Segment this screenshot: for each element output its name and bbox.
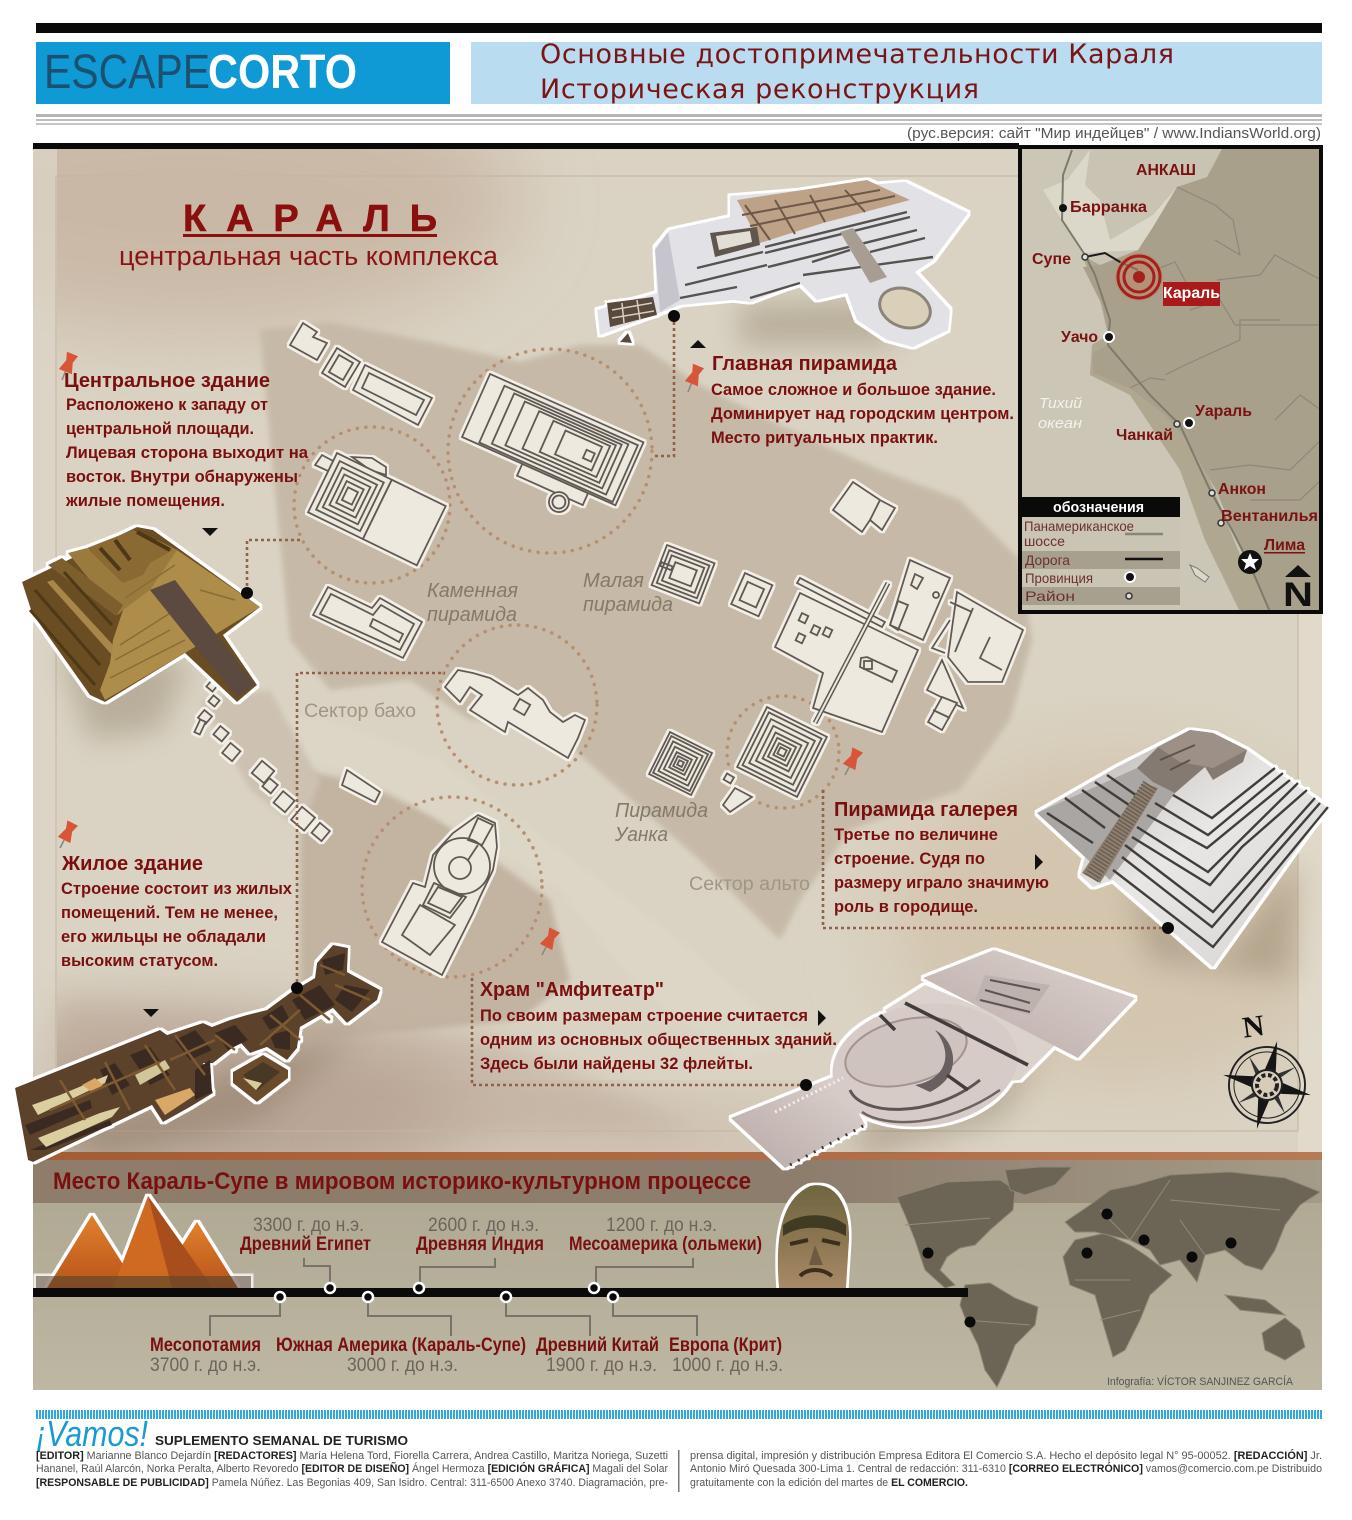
- footer masthead: SUPLEMENTO SEMANAL DE TURISMO: [155, 1433, 408, 1448]
- plan: Uanka pyramid: [649, 732, 712, 795]
- page title banner: Историческая реконструкция: [540, 74, 979, 105]
- plan: central building: [308, 453, 446, 565]
- map: place names: Анкон: [1218, 481, 1266, 498]
- text block: central building: [64, 370, 309, 510]
- map: legend: Провинция: [1025, 570, 1093, 586]
- timeline band: [33, 1152, 1322, 1390]
- timeline labels: Европа (Крит): [669, 1335, 782, 1356]
- plan: square platform: [731, 573, 772, 616]
- timeline labels: 1900 г. до н.э.: [546, 1355, 657, 1376]
- map: place names: Барранка: [1070, 199, 1147, 216]
- site name labels: Сектор бахо: [304, 701, 416, 722]
- logo: EscapeCorto: [36, 42, 450, 104]
- world map: [897, 1167, 1320, 1387]
- text block: residential building: его жильцы не обладали: [61, 927, 266, 946]
- page title banner: [471, 39, 1322, 105]
- text block: gallery pyramid: [834, 799, 1049, 916]
- heading: Karal: КАРАЛЬ: [183, 198, 437, 240]
- map: place names: Уачо: [1061, 329, 1098, 346]
- text block: main pyramid: [711, 353, 1014, 447]
- text block: main pyramid: Доминирует над городским центром.: [711, 404, 1014, 423]
- footer credits left: [RESPONSABLE DE PUBLICIDAD] Pamela Núñez. Las Begonias 409, San Isidro. Central: 311-6500 Anexo 3740. Diagramación, pre-: [36, 1477, 668, 1489]
- text block: central building: жилые помещения.: [65, 491, 225, 510]
- map: legend: Панамериканское: [1024, 518, 1134, 534]
- map: place names: Лима: [1264, 537, 1305, 554]
- dotted site circles: [294, 349, 839, 977]
- footer credits left: [36, 1450, 668, 1489]
- dotted leaders: [247, 316, 1168, 1085]
- text block: main pyramid: Место ритуальных практик.: [711, 428, 938, 447]
- footer masthead: [36, 1413, 408, 1454]
- timeline labels: 3000 г. до н.э.: [347, 1355, 458, 1376]
- 3D model: residential building: [15, 945, 380, 1162]
- timeline labels: Древний Китай: [536, 1335, 659, 1356]
- footer stripe: [36, 1410, 1322, 1419]
- timeline labels: [150, 1215, 783, 1376]
- plan: chain of small buildings: [194, 680, 380, 841]
- map: road to Caral: [1085, 253, 1138, 270]
- map: place names: Тихий: [1039, 395, 1083, 412]
- plan: north-east block: [833, 482, 895, 532]
- timeline labels: 1000 г. до н.э.: [672, 1355, 783, 1376]
- plan: main pyramid: [450, 374, 644, 533]
- text block: amphitheatre temple: одним из основных общественных зданий.: [480, 1030, 837, 1049]
- 3D model: main pyramid: [597, 180, 968, 347]
- timeline labels: 2600 г. до н.э.: [428, 1215, 539, 1236]
- map: Karal label: Караль: [1163, 285, 1220, 302]
- logo: EscapeCorto: ESCAPE: [44, 46, 210, 99]
- map: coastal band: [1082, 255, 1290, 612]
- direction triangles: [143, 340, 1043, 1026]
- site name labels: Уанка: [614, 824, 668, 846]
- illustration: Olmec head: [778, 1185, 849, 1288]
- text block: central building: восток. Внутри обнаружены: [66, 467, 298, 486]
- text block: main pyramid: Главная пирамида: [712, 353, 898, 375]
- map: Pan-American highway: [1062, 150, 1270, 612]
- text block: residential building: помещений. Тем не менее,: [61, 903, 278, 922]
- footer credits right: gratuitamente con la edición del martes de EL COMERCIO.: [690, 1477, 968, 1489]
- text block: main pyramid: Самое сложное и большое здание.: [711, 380, 996, 399]
- map: place dots: [1059, 204, 1262, 574]
- map: north arrow: N: [1283, 576, 1313, 614]
- timeline labels: 1200 г. до н.э.: [606, 1215, 717, 1236]
- timeline nodes: [275, 1283, 618, 1302]
- timeline bar: [33, 1288, 968, 1297]
- map: place names: [1032, 162, 1318, 554]
- timeline labels: Древняя Индия: [416, 1234, 544, 1255]
- text block: residential building: Жилое здание: [61, 853, 203, 875]
- timeline labels: Месопотамия: [150, 1335, 261, 1356]
- page title banner: Основные достопримечательности Караля: [540, 39, 1174, 70]
- map: place names: АНКАШ: [1136, 162, 1196, 179]
- site name labels: Пирамида: [615, 800, 708, 822]
- timeline labels: Древний Египет: [240, 1234, 371, 1255]
- footer credits left: Hananel, Raúl Alarcón, Norka Peralta, Alberto Revoredo [EDITOR DE DISEÑO] Ángel Hermoza [EDICIÓN GRÁFICA] Magali del Solar: [36, 1462, 668, 1475]
- logo: EscapeCorto: CORTO: [208, 46, 357, 99]
- 3D model: central building: [22, 527, 260, 702]
- site name labels: Каменная: [427, 580, 518, 602]
- timeline labels: 3700 г. до н.э.: [150, 1355, 261, 1376]
- footer masthead: ¡Vamos!: [36, 1413, 148, 1454]
- leader end dots: [241, 310, 1174, 1091]
- inset location map: [1019, 147, 1321, 614]
- 3D model: amphitheatre: [731, 950, 1135, 1168]
- site name labels: Малая: [583, 570, 644, 592]
- timeline heading: Место Караль-Супе в мировом историко-культурном процессе: [53, 1168, 751, 1195]
- timeline labels: 3300 г. до н.э.: [253, 1215, 364, 1236]
- credit line: (рус.версия: сайт "Мир индейцев" / www.IndiansWorld.org): [907, 125, 1321, 142]
- heading: Karal: [119, 198, 499, 271]
- plan: eastern compound: [775, 560, 1023, 732]
- gallery pyramid step lines: [1047, 768, 1328, 947]
- illustration: Egyptian pyramids: [36, 1196, 251, 1288]
- soft shadows under 3D models: [60, 300, 1300, 1160]
- map: legend: Дорога: [1025, 552, 1070, 568]
- map: land: [1083, 147, 1321, 612]
- text block: central building: Лицевая сторона выходит на: [66, 443, 309, 462]
- map: legend: [1019, 497, 1180, 605]
- site name labels: [304, 570, 810, 895]
- footer credits right: Antonio Miró Quesada 300-Lima 1. Central de redacción: 311-6310 [CORREO ELECTRÓNICO] vamos@comercio.com.pe Distribuido: [690, 1462, 1322, 1475]
- text block: residential building: Строение состоит из жилых: [61, 879, 293, 898]
- plan: north trio of buildings: [290, 323, 432, 425]
- site name labels: пирамида: [427, 604, 517, 626]
- text block: gallery pyramid: строение. Судя по: [834, 849, 985, 868]
- icon: compass rose: N: [1240, 1009, 1267, 1045]
- footer credits right: prensa digital, impresión y distribución Empresa Editora El Comercio S.A. Hecho el depósito legal N° 95-00052. [REDACCIÓN] Jr.: [690, 1449, 1322, 1462]
- map: place names: океан: [1038, 415, 1082, 432]
- top map rule: [33, 143, 1019, 149]
- map: pale Barranca province: [1043, 150, 1223, 253]
- text block: residential building: высоким статусом.: [61, 951, 218, 970]
- text block: gallery pyramid: роль в городище.: [834, 897, 978, 916]
- 3D model: gallery pyramid: [1037, 730, 1328, 967]
- text block: gallery pyramid: размеру играло значимую: [834, 873, 1049, 892]
- plan: small pyramid: [652, 545, 715, 603]
- plan: amphitheatre temple: [382, 815, 497, 975]
- map: place names: Уараль: [1195, 403, 1252, 420]
- text block: residential building: [61, 853, 293, 970]
- icon: compass rose: [1213, 1009, 1321, 1139]
- infographic credit: Infografía: VÍCTOR SANJINEZ GARCÍA: [1107, 1375, 1294, 1388]
- footer credits left: [EDITOR] Marianne Blanco Dejardín [REDACTORES] María Helena Tord, Fiorella Carrera, Andrea Castillo, Maritza Noriega, Suzetti: [36, 1450, 668, 1462]
- plan: stone pyramid: [313, 587, 422, 658]
- map: legend: Район: [1025, 588, 1075, 604]
- text block: amphitheatre temple: Здесь были найдены 32 флейты.: [480, 1054, 753, 1073]
- map: place names: Чанкай: [1116, 427, 1173, 444]
- plan: bajo sector complex: [445, 670, 585, 758]
- top black rule: [36, 23, 1322, 33]
- text block: gallery pyramid: Третье по величине: [834, 825, 998, 844]
- site name labels: пирамида: [583, 594, 673, 616]
- text block: central building: Расположено к западу от: [66, 395, 268, 414]
- text block: amphitheatre temple: [480, 979, 837, 1073]
- text block: amphitheatre temple: Храм "Амфитеатр": [480, 979, 664, 1001]
- site name labels: Сектор альто: [689, 874, 810, 895]
- map: place names: Вентанилья: [1221, 508, 1318, 525]
- map: legend: шоссе: [1024, 533, 1065, 549]
- timeline leader lines: [210, 1258, 697, 1336]
- site plan of building footprints: [194, 323, 1023, 975]
- text block: gallery pyramid: Пирамида галерея: [834, 799, 1018, 821]
- map: Caral target marker: [1115, 253, 1163, 301]
- timeline labels: Южная Америка (Караль-Супе): [276, 1335, 526, 1356]
- map background panel: [33, 149, 1322, 1152]
- text block: amphitheatre temple: По своим размерам строение считается: [480, 1006, 808, 1025]
- heading: Karal: центральная часть комплекса: [119, 241, 499, 271]
- footer credits right: [690, 1449, 1322, 1489]
- plan: gallery pyramid: [723, 583, 888, 812]
- map: north arrow: [1283, 565, 1313, 614]
- timeline labels: Месоамерика (ольмеки): [569, 1234, 762, 1255]
- map: legend: обозначения: [1053, 499, 1144, 516]
- text block: central building: центральной площади.: [66, 419, 254, 438]
- text block: central building: Центральное здание: [64, 370, 270, 392]
- pushpin markers: [54, 351, 864, 958]
- map: place names: Супе: [1032, 251, 1071, 268]
